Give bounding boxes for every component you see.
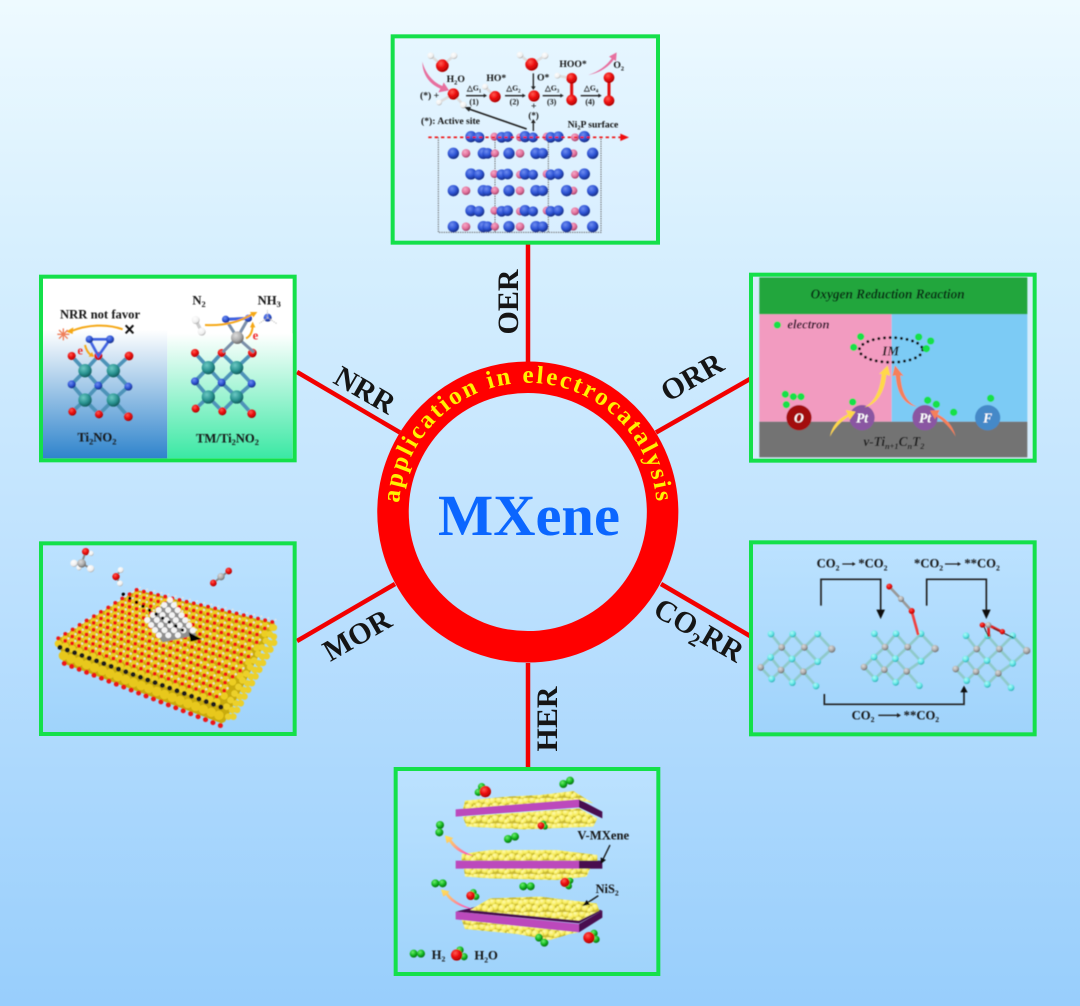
label: HER: HER bbox=[531, 686, 564, 752]
electron transfer arrows bbox=[72, 314, 253, 356]
scheme labels bbox=[420, 59, 624, 131]
NRR labels: 2 bbox=[232, 438, 236, 447]
MXene slab bbox=[58, 588, 277, 726]
substrate: 2 bbox=[919, 442, 924, 451]
NRR labels: NRR not favor bbox=[60, 307, 141, 321]
flow labels: **CO bbox=[964, 557, 996, 571]
Ni2P lattice bbox=[428, 131, 629, 232]
electrons bbox=[782, 333, 994, 416]
label: ORR: ORR bbox=[655, 346, 730, 408]
center title: MXene bbox=[438, 483, 620, 548]
flow labels: 2 bbox=[935, 715, 939, 724]
flow labels: CO bbox=[817, 557, 836, 571]
pink zone bbox=[759, 314, 892, 422]
scheme labels: + bbox=[531, 101, 537, 112]
gas molecules bbox=[70, 548, 232, 586]
panel: HER bbox=[396, 769, 658, 974]
legend: H bbox=[474, 949, 484, 963]
label: CO2RR: CO bbox=[648, 592, 704, 643]
atoms: Pt bbox=[856, 411, 869, 426]
NRR labels: 2 bbox=[89, 437, 93, 446]
NRR labels: TM/Ti bbox=[196, 431, 232, 445]
header bar: Oxygen Reduction Reaction bbox=[811, 287, 965, 302]
NRR labels: 3 bbox=[277, 300, 281, 309]
scheme labels: Ni bbox=[568, 119, 577, 130]
icon: cross bbox=[126, 325, 133, 333]
substrate bbox=[759, 422, 1027, 457]
scheme labels: (4) bbox=[585, 98, 595, 107]
legend: O bbox=[488, 949, 498, 963]
orange arrows bbox=[892, 365, 956, 437]
scheme labels: HOO* bbox=[559, 59, 587, 70]
scheme labels: P surface bbox=[580, 119, 619, 130]
scheme labels: △G bbox=[545, 84, 557, 93]
NRR labels bbox=[60, 293, 281, 447]
NRR labels: NO bbox=[236, 431, 255, 445]
atoms: O bbox=[794, 411, 804, 426]
NRR labels: 2 bbox=[201, 300, 206, 309]
diffusion arrow bbox=[123, 594, 202, 642]
panel: MOR bbox=[41, 543, 295, 734]
release arrows bbox=[441, 835, 473, 909]
scheme labels: (*): Active site bbox=[421, 116, 481, 127]
flow labels: *CO bbox=[914, 557, 939, 571]
bottom sheet bbox=[456, 897, 602, 940]
icon: starburst bbox=[57, 328, 69, 340]
reaction scheme molecules bbox=[422, 52, 617, 108]
callout: NiS2 bbox=[582, 882, 619, 906]
atoms: Pt bbox=[919, 411, 932, 426]
IM ellipse bbox=[859, 338, 923, 362]
flow labels: 2 bbox=[871, 715, 875, 724]
scheme labels: HO* bbox=[486, 73, 506, 84]
spokes bbox=[297, 243, 750, 768]
NRR labels: NH bbox=[258, 293, 277, 307]
scheme arrows bbox=[464, 73, 602, 131]
legend: 2 bbox=[442, 955, 446, 964]
NRR labels: e bbox=[253, 328, 259, 342]
panel: NRR bbox=[41, 277, 295, 460]
substrate: C bbox=[899, 434, 909, 449]
scheme labels: (1) bbox=[469, 98, 479, 107]
lattice with bent CO2 bbox=[952, 622, 1030, 691]
label: MOR: MOR bbox=[317, 603, 398, 668]
scheme labels: 4 bbox=[596, 89, 599, 94]
NRR labels: e bbox=[77, 343, 83, 357]
legend: 2 bbox=[484, 955, 488, 964]
flow labels: 2 bbox=[836, 563, 840, 572]
lattice with CO2 bbox=[861, 584, 939, 689]
scheme labels: △G bbox=[506, 84, 518, 93]
flow labels: **CO bbox=[904, 708, 935, 722]
yellow arrows bbox=[830, 365, 890, 437]
scheme labels: 3 bbox=[557, 89, 560, 94]
flow labels: 2 bbox=[884, 563, 888, 572]
scheme labels: △G bbox=[584, 84, 596, 93]
label: NRR: NRR bbox=[328, 360, 401, 421]
scheme labels: O bbox=[613, 60, 621, 71]
scheme labels: (*) + bbox=[420, 91, 439, 102]
scheme labels: 1 bbox=[479, 89, 482, 94]
scheme labels: 2 bbox=[518, 89, 521, 94]
H2 molecules bbox=[431, 777, 574, 947]
flow arrows bbox=[821, 579, 986, 704]
scheme labels: 2 bbox=[577, 124, 580, 131]
bare lattice bbox=[757, 631, 835, 689]
callout: V-MXene bbox=[577, 829, 629, 864]
ring caption: application in electrocatalysis bbox=[388, 366, 672, 502]
middle sheet bbox=[456, 850, 602, 880]
label: CO2RR: 2 bbox=[685, 629, 703, 652]
scheme labels: (2) bbox=[510, 98, 519, 107]
flow labels: *CO bbox=[858, 557, 884, 571]
NRR labels: 2 bbox=[112, 437, 116, 446]
atoms bbox=[786, 405, 1000, 430]
TM/Ti2NO2 structure bbox=[191, 310, 277, 418]
top sheet bbox=[456, 791, 602, 829]
scheme labels: 2 bbox=[621, 65, 624, 72]
flow labels: 2 bbox=[939, 563, 943, 572]
flow labels bbox=[817, 557, 1000, 724]
label: CO2RR: RR bbox=[695, 619, 750, 669]
callout: V-MXene: V-MXene bbox=[577, 829, 629, 843]
central ring bbox=[377, 362, 678, 662]
legend: electron: electron bbox=[787, 318, 830, 332]
NRR labels: NO bbox=[93, 431, 112, 445]
substrate: v-Ti bbox=[863, 434, 885, 449]
scheme labels: 2 bbox=[454, 79, 457, 86]
scheme labels: △G bbox=[467, 84, 479, 93]
substrate: n bbox=[907, 442, 912, 451]
header bar bbox=[759, 277, 1027, 314]
label: OER: OER bbox=[492, 269, 525, 335]
NRR labels: 2 bbox=[255, 438, 259, 447]
substrate: T bbox=[912, 434, 921, 449]
legend: H bbox=[432, 948, 442, 962]
scheme labels: H bbox=[447, 74, 454, 85]
panel: CO2RR bbox=[751, 542, 1035, 734]
IM ellipse: IM bbox=[881, 343, 900, 358]
scheme labels: O* bbox=[537, 72, 550, 83]
Ti2NO2 structure bbox=[68, 335, 133, 421]
atoms: F bbox=[982, 411, 992, 426]
silver cluster bbox=[147, 598, 197, 642]
scheme labels: (*) bbox=[528, 110, 539, 120]
scheme labels: (3) bbox=[547, 98, 557, 107]
callout: NiS2: NiS bbox=[596, 882, 615, 896]
panel: OER bbox=[393, 36, 658, 243]
scheme labels: O bbox=[457, 74, 465, 85]
NRR labels: Ti bbox=[77, 431, 89, 445]
panel: ORR bbox=[751, 275, 1035, 461]
H2O molecules bbox=[466, 783, 600, 943]
callout: NiS2: 2 bbox=[615, 889, 619, 898]
blue zone bbox=[892, 314, 1027, 422]
legend bbox=[410, 946, 498, 964]
flow labels: 2 bbox=[996, 563, 1000, 572]
flow labels: CO bbox=[852, 708, 871, 722]
NRR labels: N bbox=[192, 293, 201, 307]
substrate: n+1 bbox=[885, 442, 899, 451]
